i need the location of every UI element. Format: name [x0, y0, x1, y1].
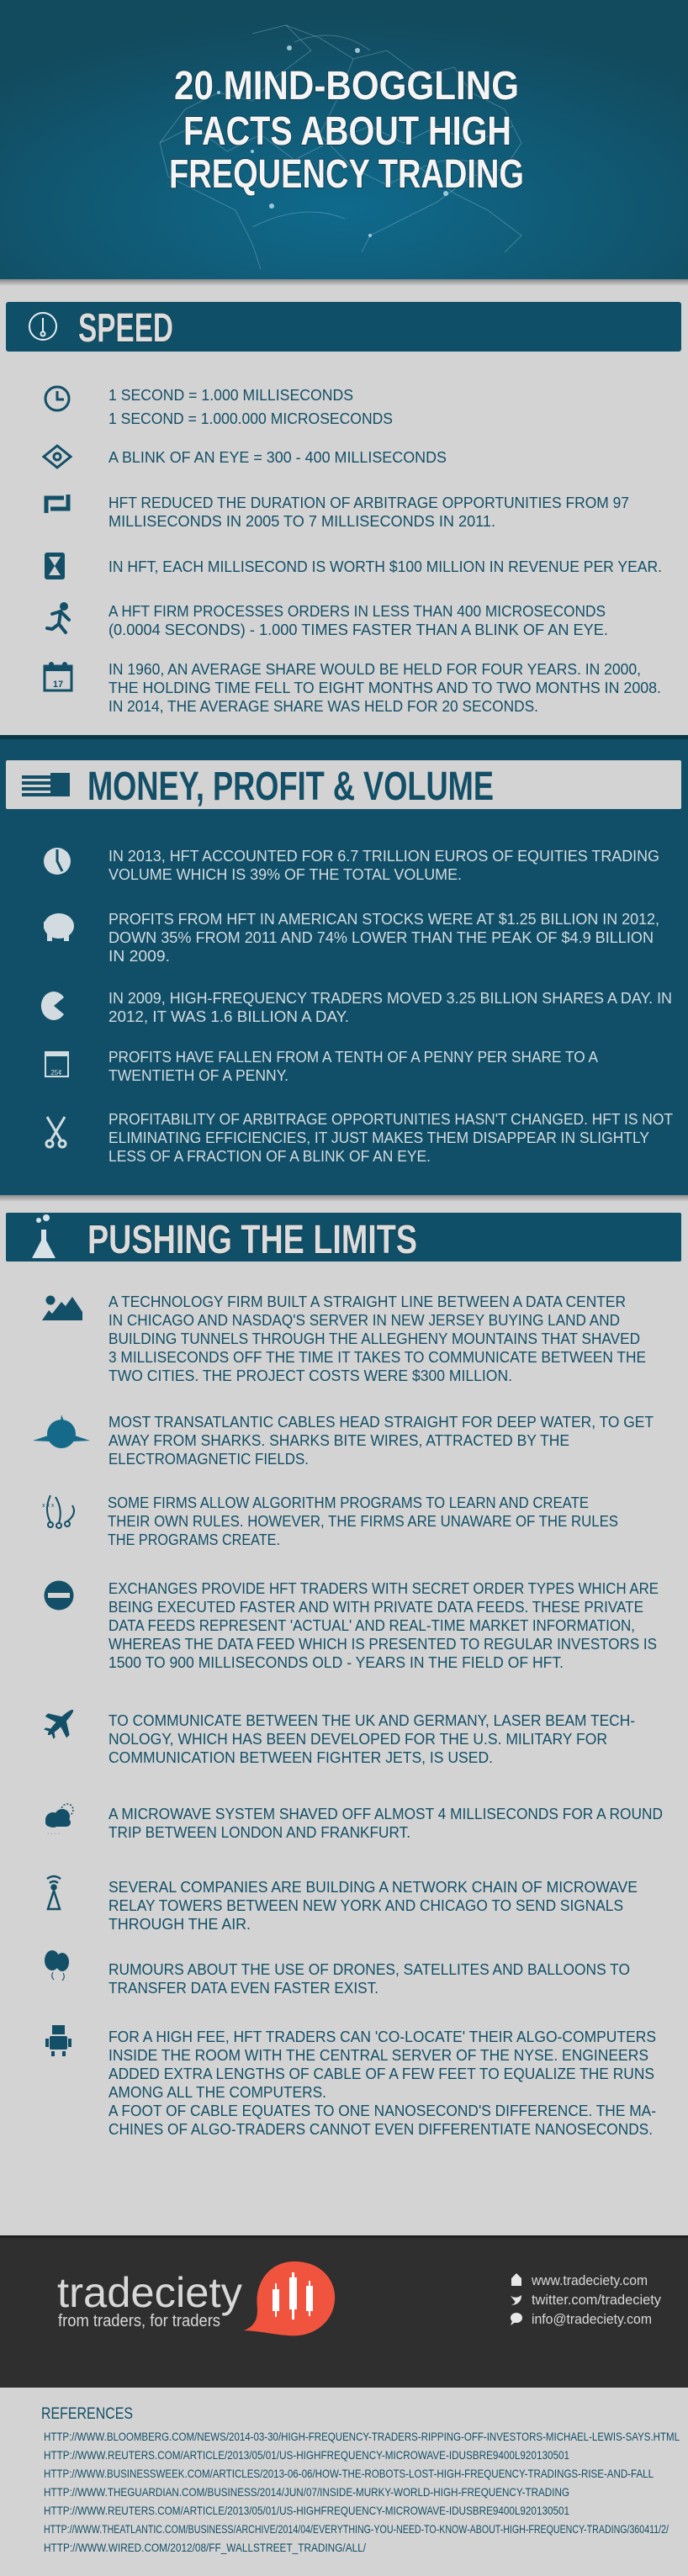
- icon: money stack: [22, 773, 70, 796]
- text: tunnel: IN CHICAGO AND NASDAQ'S SERVER IN NEW JERSEY BUYING LAND AND: [108, 1312, 620, 1329]
- text: holding time: THE HOLDING TIME FELL TO EIGHT MONTHS AND TO TWO MONTHS IN 2008.: [108, 680, 661, 696]
- text: arbitrage: HFT REDUCED THE DURATION OF ARBITRAGE OPPORTUNITIES FROM 97: [108, 495, 629, 511]
- text: profits american: IN 2009.: [108, 948, 170, 965]
- text: penny: TWENTIETH OF A PENNY.: [108, 1067, 288, 1084]
- panel: speed facts: [44, 387, 662, 715]
- contacts: [511, 2272, 661, 2327]
- contacts: www.tradeciety.com: [531, 2272, 648, 2288]
- icon: tower: [47, 1876, 61, 1909]
- references: HTTP://WWW.WIRED.COM/2012/08/FF_WALLSTREET_TRADING/ALL/: [44, 2541, 366, 2554]
- references: [41, 2405, 680, 2554]
- text: tunnel: 3 MILLISECONDS OFF THE TIME IT TAKES TO COMMUNICATE BETWEEN THE: [108, 1349, 646, 1366]
- heading: speed: [6, 302, 681, 352]
- text: processes orders: A HFT FIRM PROCESSES ORDERS IN LESS THAN 400 MICROSECONDS: [108, 603, 606, 620]
- icon: hourglass: [45, 553, 65, 579]
- text: sharks: AWAY FROM SHARKS. SHARKS BITE WIRES, ATTRACTED BY THE: [108, 1432, 569, 1449]
- text: profitability: [108, 1111, 673, 1165]
- text: sharks: [108, 1414, 654, 1468]
- text: co-locate: [108, 2029, 656, 2138]
- text: blink: A BLINK OF AN EYE = 300 - 400 MILLISECONDS: [108, 449, 447, 466]
- icon: pie: [44, 848, 71, 875]
- icon: shop: [45, 1051, 69, 1076]
- icon: repeat: [46, 495, 68, 513]
- text: profits american: PROFITS FROM HFT IN AMERICAN STOCKS WERE AT $1.25 BILLION IN 2012,: [108, 911, 659, 928]
- text: drones: RUMOURS ABOUT THE USE OF DRONES, SATELLITES AND BALLOONS TO: [108, 1961, 630, 1978]
- contacts: twitter.com/tradeciety: [532, 2292, 661, 2308]
- text: secret order types: DATA FEEDS REPRESENT 'ACTUAL' AND REAL-TIME MARKET INFORMATION,: [108, 1617, 635, 1634]
- panel: pushing the limits facts: [33, 1293, 663, 2138]
- icon: scissors: [46, 1117, 66, 1147]
- text: relay towers: SEVERAL COMPANIES ARE BUILDING A NETWORK CHAIN OF MICROWAVE: [108, 1879, 638, 1896]
- text: penny: PROFITS HAVE FALLEN FROM A TENTH OF A PENNY PER SHARE TO A: [108, 1049, 598, 1066]
- text: seconds: [108, 387, 393, 427]
- header banner: [0, 0, 688, 286]
- icon: mountains: [42, 1295, 82, 1320]
- icon: pacman: [41, 992, 64, 1020]
- panel: money, profit & volume: [0, 735, 688, 1202]
- text: secret order types: BEING EXECUTED FASTER AND WITH PRIVATE DATA FEEDS. THESE PRIVATE: [108, 1599, 643, 1616]
- icon: shop: 25¢: [50, 1069, 62, 1076]
- text: 2013 volume: IN 2013, HFT ACCOUNTED FOR 6.7 TRILLION EUROS OF EQUITIES TRADING: [108, 848, 659, 865]
- text: secret order types: [108, 1580, 659, 1671]
- text: shares a day: IN 2009, HIGH-FREQUENCY TRADERS MOVED 3.25 BILLION SHARES A DAY. IN: [108, 990, 672, 1007]
- icon: eye: [44, 446, 71, 468]
- heading: speed: SPEED: [78, 306, 173, 351]
- logo text: tradeciety: [57, 2269, 242, 2316]
- icon: clock: [45, 387, 69, 410]
- text: processes orders: (0.0004 SECONDS) - 1.000 TIMES FASTER THAN A BLINK OF AN EYE.: [108, 622, 608, 638]
- text: tunnel: [108, 1293, 646, 1384]
- title: FACTS ABOUT HIGH: [183, 109, 511, 154]
- references: HTTP://WWW.REUTERS.COM/ARTICLE/2013/05/01/US-HIGHFREQUENCY-MICROWAVE-IDUSBRE9400L920130501: [44, 2448, 569, 2462]
- text: arbitrage: [108, 495, 629, 530]
- text: processes orders: [108, 603, 608, 638]
- text: 2013 volume: VOLUME WHICH IS 39% OF THE TOTAL VOLUME.: [108, 866, 462, 883]
- text: drones: [108, 1961, 630, 1997]
- text: seconds: 1 SECOND = 1.000 MILLISECONDS: [108, 387, 353, 404]
- logo text: from traders, for traders: [58, 2312, 220, 2330]
- text: seconds: 1 SECOND = 1.000.000 MICROSECONDS: [108, 410, 393, 427]
- text: microwave system: [108, 1806, 663, 1841]
- text: algorithms: [108, 1494, 618, 1548]
- text: secret order types: EXCHANGES PROVIDE HFT TRADERS WITH SECRET ORDER TYPES WHICH ARE: [108, 1580, 659, 1597]
- text: profits american: DOWN 35% FROM 2011 AND 74% LOWER THAN THE PEAK OF $4.9 BILLION: [108, 929, 654, 946]
- text: shares a day: 2012, IT WAS 1.6 BILLION A DAY.: [108, 1008, 349, 1025]
- text: co-locate: FOR A HIGH FEE, HFT TRADERS CAN 'CO-LOCATE' THEIR ALGO-COMPUTERS: [108, 2029, 656, 2045]
- text: profitability: LESS OF A FRACTION OF A BLINK OF AN EYE.: [108, 1148, 431, 1165]
- text: arbitrage: MILLISECONDS IN 2005 TO 7 MILLISECONDS IN 2011.: [108, 513, 495, 530]
- text: co-locate: ADDED EXTRA LENGTHS OF CABLE OF A FEW FEET TO EQUALIZE THE RUNS: [108, 2066, 654, 2082]
- icon: speedometer: [29, 313, 56, 340]
- text: relay towers: THROUGH THE AIR.: [108, 1916, 251, 1933]
- icon: weather cloud: [45, 1804, 73, 1837]
- references: HTTP://WWW.REUTERS.COM/ARTICLE/2013/05/01/US-HIGHFREQUENCY-MICROWAVE-IDUSBRE9400L920130501: [44, 2504, 569, 2517]
- icon: runner: [47, 604, 69, 632]
- heading: pushing the limits: PUSHING THE LIMITS: [87, 1218, 417, 1262]
- icon: logo bubble: [244, 2261, 335, 2335]
- text: tunnel: A TECHNOLOGY FIRM BUILT A STRAIGHT LINE BETWEEN A DATA CENTER: [108, 1293, 626, 1310]
- text: holding time: IN 2014, THE AVERAGE SHARE WAS HELD FOR 20 SECONDS.: [108, 698, 538, 715]
- text: laser beam: [108, 1712, 635, 1766]
- icon: calendar: [45, 662, 71, 690]
- icon: no entry: [44, 1581, 74, 1610]
- text: tunnel: BUILDING TUNNELS THROUGH THE ALLEGHENY MOUNTAINS THAT SHAVED: [108, 1330, 640, 1347]
- text: penny: [108, 1049, 598, 1084]
- heading: pushing the limits: [6, 1213, 681, 1262]
- text: sharks: MOST TRANSATLANTIC CABLES HEAD STRAIGHT FOR DEEP WATER, TO GET: [108, 1414, 654, 1431]
- text: laser beam: COMMUNICATION BETWEEN FIGHTER JETS, IS USED.: [108, 1749, 493, 1766]
- text: tunnel: TWO CITIES. THE PROJECT COSTS WERE $300 MILLION.: [108, 1367, 512, 1384]
- icon: piggy bank: [44, 913, 74, 941]
- text: microwave system: A MICROWAVE SYSTEM SHAVED OFF ALMOST 4 MILLISECONDS FOR A ROUND: [108, 1806, 663, 1822]
- text: algorithms: SOME FIRMS ALLOW ALGORITHM PROGRAMS TO LEARN AND CREATE: [108, 1494, 589, 1511]
- contacts: info@tradeciety.com: [532, 2311, 652, 2327]
- icon: robot: [45, 2025, 71, 2056]
- text: secret order types: WHEREAS THE DATA FEED WHICH IS PRESENTED TO REGULAR INVESTORS IS: [108, 1636, 657, 1653]
- text: 2013 volume: [108, 848, 659, 883]
- text: co-locate: INSIDE THE ROOM WITH THE CENTRAL SERVER OF THE NYSE. ENGINEERS: [108, 2047, 648, 2064]
- icon: playbook: x x x: [42, 1503, 55, 1509]
- text: laser beam: TO COMMUNICATE BETWEEN THE UK AND GERMANY, LASER BEAM TECH-: [108, 1712, 635, 1729]
- icon: balloons: [45, 1950, 69, 1981]
- text: profitability: PROFITABILITY OF ARBITRAGE OPPORTUNITIES HASN'T CHANGED. HFT IS NOT: [108, 1111, 673, 1128]
- icon: flask: [32, 1214, 56, 1258]
- references: HTTP://WWW.THEGUARDIAN.COM/BUSINESS/2014/JUN/07/INSIDE-MURKY-WORLD-HIGH-FREQUENCY-TRADING: [44, 2485, 569, 2499]
- text: drones: TRANSFER DATA EVEN FASTER EXIST.: [108, 1980, 378, 1997]
- text: shares a day: [108, 990, 672, 1025]
- heading: money: MONEY, PROFIT & VOLUME: [87, 764, 494, 809]
- text: millisecond worth: IN HFT, EACH MILLISECOND IS WORTH $100 MILLION IN REVENUE PER YEAR.: [108, 558, 662, 575]
- text: holding time: [108, 661, 661, 715]
- footer: tradeciety: [0, 2235, 688, 2388]
- title: 20 MIND-BOGGLING: [174, 64, 519, 108]
- text: co-locate: AMONG ALL THE COMPUTERS.: [108, 2084, 326, 2101]
- icon: playbook: [42, 1495, 74, 1528]
- text: algorithms: THEIR OWN RULES. HOWEVER, THE FIRMS ARE UNAWARE OF THE RULES: [108, 1513, 618, 1530]
- text: secret order types: 1500 TO 900 MILLISECONDS OLD - YEARS IN THE FIELD OF HFT.: [108, 1654, 564, 1671]
- text: algorithms: THE PROGRAMS CREATE.: [108, 1531, 280, 1548]
- icon: weather cloud: · · · ·: [47, 1831, 60, 1837]
- icon: calendar: 17: [53, 680, 63, 690]
- text: microwave system: TRIP BETWEEN LONDON AND FRANKFURT.: [108, 1824, 410, 1841]
- text: co-locate: A FOOT OF CABLE EQUATES TO ONE NANOSECOND'S DIFFERENCE. THE MA-: [108, 2103, 656, 2119]
- text: profitability: ELIMINATING EFFICIENCIES, IT JUST MAKES THEM DISAPPEAR IN SLIGHTLY: [108, 1129, 649, 1146]
- text: relay towers: RELAY TOWERS BETWEEN NEW YORK AND CHICAGO TO SEND SIGNALS: [108, 1897, 623, 1914]
- text: laser beam: NOLOGY, WHICH HAS BEEN DEVELOPED FOR THE U.S. MILITARY FOR: [108, 1731, 607, 1748]
- references: REFERENCES: [41, 2405, 133, 2423]
- icon: shark: [33, 1415, 90, 1448]
- title: [169, 64, 524, 197]
- text: sharks: ELECTROMAGNETIC FIELDS.: [108, 1451, 309, 1468]
- text: co-locate: CHINES OF ALGO-TRADERS CANNOT EVEN DIFFERENTIATE NANOSECONDS.: [108, 2121, 653, 2138]
- icon: plane: [37, 1699, 84, 1746]
- title: FREQUENCY TRADING: [169, 152, 524, 197]
- text: profits american: [108, 911, 659, 965]
- text: holding time: IN 1960, AN AVERAGE SHARE WOULD BE HELD FOR FOUR YEARS. IN 2000,: [108, 661, 641, 678]
- text: relay towers: [108, 1879, 638, 1933]
